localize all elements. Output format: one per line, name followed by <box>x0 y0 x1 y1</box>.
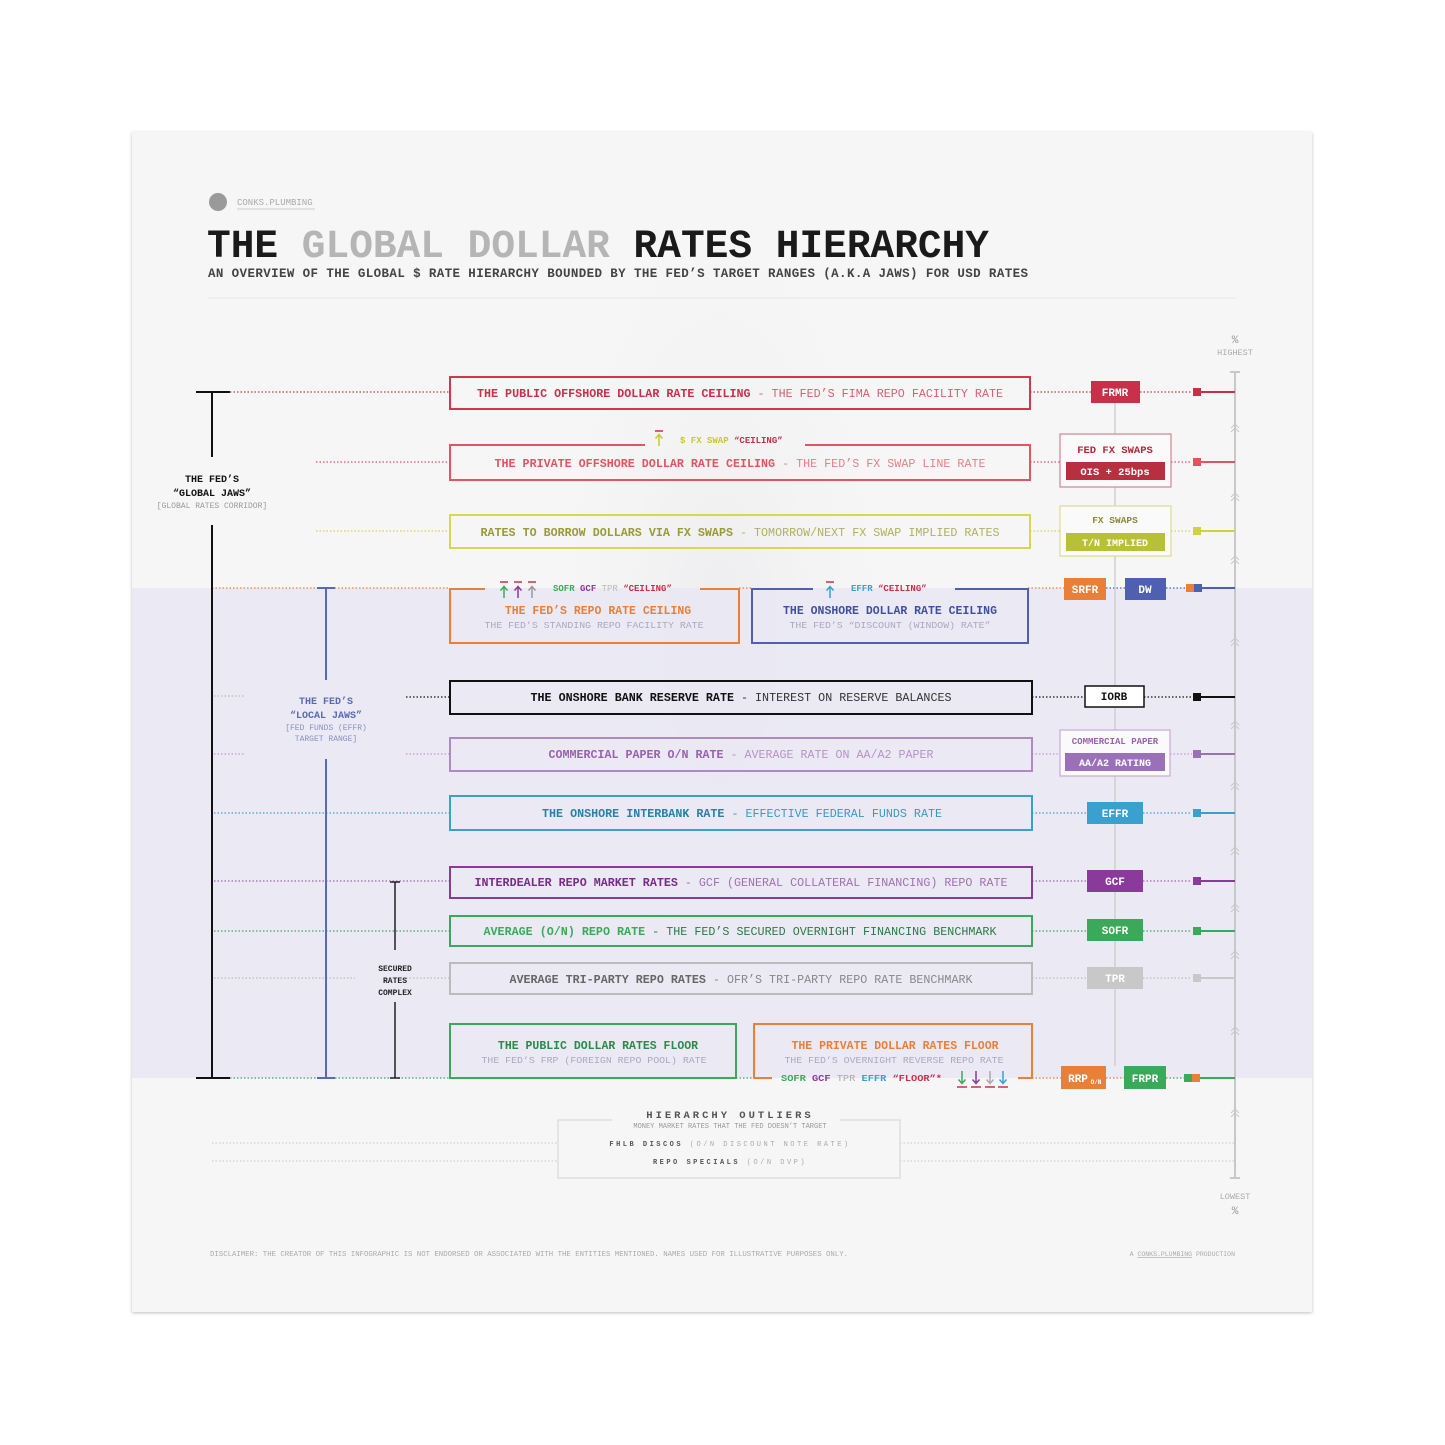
box: standing repo facility: THE FED’S STANDING REPO FACILITY RATE <box>484 621 704 631</box>
box: discount window <box>752 582 1028 643</box>
box: public floor FRP <box>450 1024 736 1078</box>
panel: hierarchy outliers <box>212 1110 1235 1178</box>
badge: FRPR: FRPR <box>1132 1074 1159 1086</box>
header: logo and brand: CONKS.PLUMBING <box>237 198 313 208</box>
badge: Fed FX swaps: FED FX SWAPS <box>1077 445 1153 457</box>
box: discount window: THE ONSHORE DOLLAR RATE CEILING <box>783 605 997 618</box>
badge: FX swaps <box>1060 506 1171 556</box>
badge: GCF: GCF <box>1105 877 1125 889</box>
bracket: secured rates complex: SECURED <box>378 965 412 974</box>
bracket: local jaws: [FED FUNDS (EFFR) <box>285 724 367 733</box>
bracket: global jaws: [GLOBAL RATES CORRIDOR] <box>157 502 267 511</box>
badge: DW: DW <box>1138 585 1152 597</box>
box: TPR <box>450 963 1032 994</box>
badge: SOFR: SOFR <box>1102 926 1129 938</box>
box: discount window: THE FED’S “DISCOUNT (WINDOW) RATE” <box>790 621 990 631</box>
box: standing repo facility <box>450 582 739 643</box>
right axis scale: HIGHEST <box>1217 348 1253 358</box>
badge: RRP <box>1061 1066 1106 1089</box>
box: EFFR: THE ONSHORE INTERBANK RATE - EFFECTIVE FEDERAL FUNDS RATE <box>542 808 942 821</box>
box: SOFR: AVERAGE (O/N) REPO RATE - THE FED’S SECURED OVERNIGHT FINANCING BENCHMARK <box>484 926 997 939</box>
box: FX swap line <box>450 431 1030 480</box>
badge: GCF <box>1087 870 1143 892</box>
box: private floor RRP: THE FED’S OVERNIGHT REVERSE REPO RATE <box>784 1056 1004 1066</box>
box: discount window: EFFR “CEILING” <box>851 584 927 594</box>
box: GCF: INTERDEALER REPO MARKET RATES - GCF (GENERAL COLLATERAL FINANCING) REPO RATE <box>474 877 1008 890</box>
right axis scale: % <box>1232 335 1239 347</box>
badge: SRFR <box>1064 578 1106 600</box>
box: FX swaps implied: RATES TO BORROW DOLLARS VIA FX SWAPS - TOMORROW/NEXT FX SWAP IMPLIED RATES <box>480 527 1000 540</box>
box: standing repo facility: THE FED’S REPO RATE CEILING <box>505 605 691 618</box>
box: IORB <box>450 681 1032 714</box>
box: FX swap line: THE PRIVATE OFFSHORE DOLLAR RATE CEILING - THE FED’S FX SWAP LINE RATE <box>494 458 986 471</box>
bracket: secured rates complex: RATES <box>383 977 407 986</box>
bracket: local jaws: THE FED’S <box>299 696 353 708</box>
badge: TPR: TPR <box>1105 974 1125 986</box>
box: public floor FRP: THE FED’S FRP (FOREIGN REPO POOL) RATE <box>482 1056 706 1066</box>
right axis scale: % <box>1232 1206 1239 1218</box>
box: private floor RRP: SOFR GCF TPR EFFR “FLOOR”* <box>781 1073 942 1084</box>
bracket: secured rates complex: COMPLEX <box>378 989 412 998</box>
badge: FRMR <box>1091 381 1140 403</box>
box: FIMA repo facility: THE PUBLIC OFFSHORE DOLLAR RATE CEILING - THE FED’S FIMA REPO FACILITY RATE <box>477 388 1003 401</box>
box: GCF <box>450 867 1032 898</box>
panel: hierarchy outliers: HIERARCHY OUTLIERS <box>646 1110 814 1122</box>
badge: Fed FX swaps: OIS + 25bps <box>1080 467 1150 479</box>
bracket: local jaws <box>285 588 367 1078</box>
box: IORB: THE ONSHORE BANK RESERVE RATE - INTEREST ON RESERVE BALANCES <box>530 692 952 705</box>
box: FIMA repo facility <box>450 377 1030 409</box>
panel: hierarchy outliers: MONEY MARKET RATES THAT THE FED DOESN’T TARGET <box>633 1123 827 1131</box>
box: public floor FRP: THE PUBLIC DOLLAR RATES FLOOR <box>498 1040 698 1053</box>
badge: RRP: O/N <box>1091 1079 1102 1086</box>
badge: SRFR: SRFR <box>1072 585 1099 597</box>
badge: RRP: RRP <box>1068 1074 1088 1086</box>
box: private floor RRP <box>754 1024 1032 1087</box>
badge: EFFR <box>1087 802 1143 824</box>
box: standing repo facility: SOFR GCF TPR “CEILING” <box>553 584 672 594</box>
bracket: local jaws: TARGET RANGE] <box>295 735 357 744</box>
badge: Fed FX swaps <box>1060 434 1171 487</box>
badge: FRMR: FRMR <box>1102 388 1129 400</box>
right axis scale: LOWEST <box>1220 1192 1250 1202</box>
poster card <box>132 120 1312 1312</box>
badges <box>1060 381 1171 1089</box>
badge: FRPR <box>1124 1066 1166 1089</box>
centre badge spine <box>1114 403 1116 1066</box>
header: logo and brand <box>209 193 315 211</box>
box: commercial paper: COMMERCIAL PAPER O/N RATE - AVERAGE RATE ON AA/A2 PAPER <box>548 749 934 762</box>
bracket: global jaws: THE FED’S <box>185 474 239 486</box>
badge: SOFR <box>1087 919 1143 941</box>
panel: hierarchy outliers: FHLB DISCOS (O/N DISCOUNT NOTE RATE) <box>609 1141 851 1149</box>
badge: commercial paper: AA/A2 RATING <box>1079 758 1151 770</box>
badge: commercial paper <box>1060 730 1170 776</box>
right axis scale <box>1217 335 1253 1218</box>
footer: DISCLAIMER: THE CREATOR OF THIS INFOGRAPHIC IS NOT ENDORSED OR ASSOCIATED WITH THE ENTITIES MENTIONED. NAMES USED FOR ILLUSTRATIVE PURPOSES ONLY. <box>210 1251 848 1259</box>
badge: IORB: IORB <box>1101 692 1128 704</box>
bracket: global jaws: “GLOBAL JAWS” <box>173 488 251 500</box>
badge: DW <box>1125 578 1166 600</box>
badge: FX swaps: FX SWAPS <box>1092 515 1138 526</box>
bracket: global jaws <box>157 392 267 1078</box>
box: FX swap line: $ FX SWAP “CEILING” <box>680 436 783 446</box>
title: THE GLOBAL DOLLAR RATES HIERARCHY <box>207 224 989 269</box>
footer <box>210 1251 1235 1259</box>
bracket: local jaws: “LOCAL JAWS” <box>290 710 362 722</box>
badge: EFFR: EFFR <box>1102 809 1129 821</box>
badge: IORB <box>1085 686 1144 707</box>
footer: A CONKS.PLUMBING PRODUCTION <box>1130 1251 1235 1258</box>
subtitle: AN OVERVIEW OF THE GLOBAL $ RATE HIERARCHY BOUNDED BY THE FED’S TARGET RANGES (A.K.A JAWS) FOR USD RATES <box>208 267 1028 281</box>
connector dotted lines <box>212 392 1192 1078</box>
badge: commercial paper: COMMERCIAL PAPER <box>1072 737 1159 747</box>
bracket: secured rates complex <box>378 882 412 1078</box>
box: TPR: AVERAGE TRI-PARTY REPO RATES - OFR’S TRI-PARTY REPO RATE BENCHMARK <box>510 974 973 987</box>
axis markers <box>1184 388 1235 1082</box>
box: EFFR <box>450 796 1032 830</box>
badge: TPR <box>1087 967 1143 989</box>
box: commercial paper <box>450 738 1032 771</box>
badge: FX swaps: T/N IMPLIED <box>1082 538 1148 550</box>
box: SOFR <box>450 916 1032 946</box>
box: private floor RRP: THE PRIVATE DOLLAR RATES FLOOR <box>791 1040 999 1053</box>
panel: hierarchy outliers: REPO SPECIALS (O/N DVP) <box>653 1159 807 1167</box>
box: FX swaps implied <box>450 515 1030 548</box>
